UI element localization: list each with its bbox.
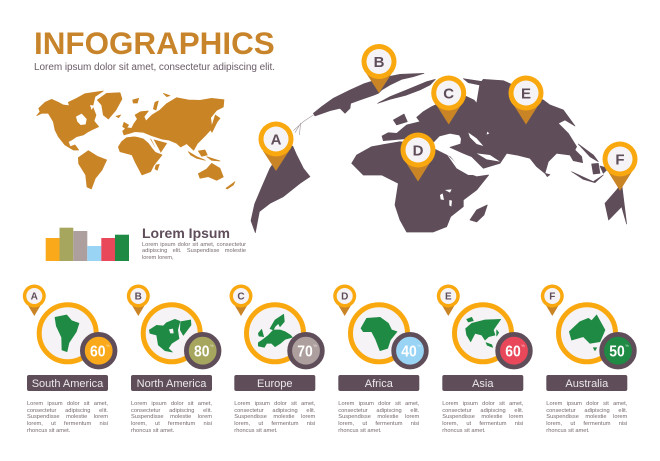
label bbox=[234, 375, 315, 391]
description: Suspendisse molestie lorem bbox=[442, 414, 523, 420]
card: South America bbox=[23, 284, 115, 435]
description: Suspendisse molestie lorem bbox=[27, 414, 108, 420]
label: Africa bbox=[365, 378, 394, 390]
subtitle: Lorem ipsum dolor sit amet, consectetur adipiscing elit. bbox=[34, 62, 275, 73]
description: Lorem ipsum dolor sit amet, bbox=[27, 401, 108, 407]
card pin D: D bbox=[341, 292, 348, 303]
ring bbox=[558, 305, 616, 362]
side text: lorem lorem, bbox=[142, 255, 174, 261]
side heading: Lorem Ipsum bbox=[142, 225, 230, 241]
pin D: D bbox=[413, 142, 424, 160]
card: North America bbox=[127, 284, 219, 435]
description: rhoncus sit amet. bbox=[442, 428, 486, 434]
description: rhoncus sit amet. bbox=[131, 428, 174, 434]
card pin A bbox=[23, 284, 46, 316]
description: lorem, ut fermentum nisi bbox=[546, 421, 627, 427]
badge 60 bbox=[498, 334, 530, 367]
description: Lorem ipsum dolor sit amet, bbox=[338, 401, 419, 407]
description: consectetur adipiscing elit. bbox=[442, 408, 523, 414]
badge 80: % bbox=[210, 343, 214, 348]
card pin F bbox=[541, 284, 564, 316]
pin C: C bbox=[443, 86, 454, 102]
badge 80: 80 bbox=[194, 344, 210, 361]
description: lorem, ut fermentum nisi bbox=[442, 421, 523, 427]
card: Europe bbox=[230, 284, 322, 435]
ring bbox=[454, 305, 512, 362]
icon: South America bbox=[55, 315, 79, 352]
icon: Asia bbox=[466, 317, 501, 347]
icon: North America bbox=[149, 319, 191, 352]
badge 70: 70 bbox=[297, 344, 313, 361]
description: Suspendisse molestie lorem bbox=[234, 414, 315, 420]
badge 60: % bbox=[521, 343, 525, 348]
card: Asia bbox=[437, 284, 530, 435]
pin A bbox=[258, 122, 294, 171]
card pin A: A bbox=[31, 292, 38, 303]
ring bbox=[39, 305, 96, 362]
card pin B bbox=[127, 284, 150, 316]
badge 70 bbox=[290, 334, 322, 367]
badge 70: % bbox=[313, 343, 317, 348]
label: North America bbox=[137, 378, 207, 390]
small world map bbox=[37, 91, 235, 189]
card pin E: E bbox=[445, 292, 452, 303]
badge 50 bbox=[602, 334, 634, 367]
icon: Australia bbox=[569, 315, 605, 351]
globe map bbox=[251, 73, 627, 233]
label: Asia bbox=[472, 378, 494, 390]
description: Suspendisse molestie lorem bbox=[131, 414, 212, 420]
description: consectetur adipiscing elit. bbox=[338, 408, 419, 414]
pin C bbox=[431, 76, 466, 124]
pin B: B bbox=[374, 54, 385, 71]
description: Suspendisse molestie lorem bbox=[546, 414, 627, 420]
card pin E bbox=[437, 284, 460, 316]
pin D bbox=[400, 132, 436, 182]
description: rhoncus sit amet. bbox=[234, 428, 278, 434]
badge 40: 40 bbox=[401, 344, 417, 361]
description: rhoncus sit amet. bbox=[546, 428, 590, 434]
description bbox=[546, 401, 627, 435]
ring bbox=[143, 305, 200, 362]
badge 40: % bbox=[417, 343, 421, 348]
description: rhoncus sit amet. bbox=[338, 428, 382, 434]
badge 60: 60 bbox=[90, 344, 106, 361]
pin A: A bbox=[271, 132, 282, 148]
ring bbox=[246, 305, 304, 362]
description bbox=[442, 401, 523, 435]
card: Africa bbox=[333, 284, 426, 435]
pin E bbox=[508, 76, 544, 124]
description: consectetur adipiscing elit. bbox=[546, 408, 627, 414]
badge 80 bbox=[186, 334, 219, 367]
label: South America bbox=[32, 378, 104, 390]
card pin F: F bbox=[549, 292, 555, 303]
badge 60 bbox=[82, 334, 115, 367]
side text: Lorem ipsum dolor sit amet, consectetur bbox=[142, 242, 246, 248]
description: consectetur adipiscing elit. bbox=[234, 408, 315, 414]
card pin B: B bbox=[135, 292, 142, 303]
description: Lorem ipsum dolor sit amet, bbox=[546, 401, 627, 407]
card pin C bbox=[230, 284, 252, 316]
label: Europe bbox=[257, 378, 293, 390]
label bbox=[338, 375, 419, 391]
label: Australia bbox=[565, 378, 609, 390]
label bbox=[27, 375, 108, 391]
description bbox=[131, 401, 212, 435]
icon: Africa bbox=[361, 317, 397, 351]
ring bbox=[350, 305, 408, 362]
description: rhoncus sit amet. bbox=[27, 428, 70, 434]
label bbox=[131, 375, 212, 391]
description: lorem, ut fermentum nisi bbox=[234, 421, 315, 427]
description: Suspendisse molestie lorem bbox=[338, 414, 419, 420]
label bbox=[442, 375, 523, 391]
side text: adipiscing elit. Suspendisse molestie bbox=[142, 248, 246, 254]
description: Lorem ipsum dolor sit amet, bbox=[131, 401, 212, 407]
badge 50: % bbox=[625, 343, 629, 348]
description: lorem, ut fermentum nisi bbox=[131, 421, 212, 427]
description: consectetur adipiscing elit. bbox=[131, 408, 212, 414]
description: Lorem ipsum dolor sit amet, bbox=[234, 401, 315, 407]
badge 40 bbox=[394, 334, 426, 367]
pin F bbox=[602, 142, 638, 191]
description bbox=[234, 401, 315, 435]
badge 50: 50 bbox=[609, 344, 625, 361]
card: Australia bbox=[541, 284, 634, 435]
badge 60: % bbox=[106, 343, 110, 348]
pin E: E bbox=[521, 86, 531, 102]
description: Lorem ipsum dolor sit amet, bbox=[442, 401, 523, 407]
description: lorem, ut fermentum nisi bbox=[27, 421, 108, 427]
badge 60: 60 bbox=[505, 344, 521, 361]
card pin C: C bbox=[237, 292, 245, 303]
description: lorem, ut fermentum nisi bbox=[338, 421, 419, 427]
description bbox=[338, 401, 419, 435]
title: INFOGRAPHICS bbox=[34, 26, 275, 61]
label bbox=[546, 375, 627, 391]
pin B bbox=[362, 44, 396, 93]
pin F: F bbox=[615, 152, 625, 168]
icon: Europe bbox=[258, 314, 292, 347]
side text bbox=[142, 242, 246, 264]
description: consectetur adipiscing elit. bbox=[27, 408, 108, 414]
bar chart bbox=[46, 228, 129, 261]
description bbox=[27, 401, 108, 435]
card pin D bbox=[333, 284, 356, 316]
